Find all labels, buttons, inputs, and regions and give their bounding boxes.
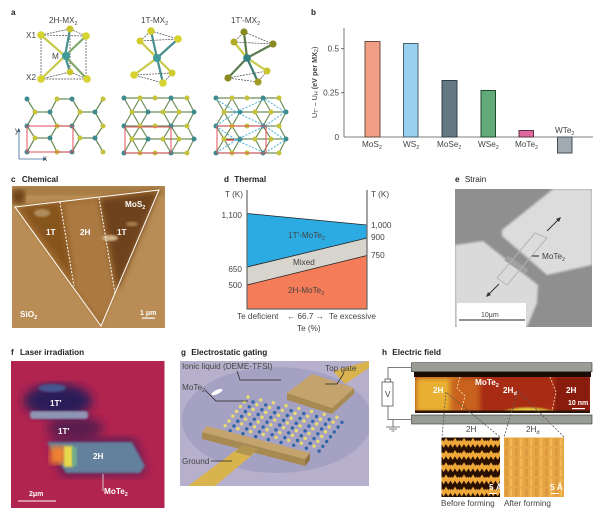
bar labels: WTe bbox=[555, 126, 571, 135]
heading: c Chemical bbox=[11, 175, 58, 184]
bar labels: MoS bbox=[362, 140, 379, 149]
label 2H: 2H bbox=[80, 228, 91, 237]
axes indicator bbox=[15, 126, 47, 163]
left axis labels bbox=[222, 190, 243, 290]
lattice dots bbox=[224, 395, 344, 453]
panel a: crystal structures bbox=[11, 8, 288, 163]
bar labels: WSe bbox=[478, 140, 496, 149]
panel d: thermal phase diagram bbox=[222, 175, 392, 333]
label 2H lower: 2H bbox=[466, 425, 477, 434]
bars bbox=[365, 42, 572, 153]
voltage label: V bbox=[385, 390, 391, 399]
heading: h Electric field bbox=[382, 348, 441, 357]
panel f: laser irradiation bbox=[11, 348, 164, 508]
STM before forming: 5 Å bbox=[489, 482, 502, 492]
2Hd label: d bbox=[513, 391, 517, 397]
label 1T' lower: 1T′ bbox=[58, 427, 70, 436]
label SiO2: 2 bbox=[34, 315, 37, 321]
panel e: strain bbox=[455, 175, 592, 327]
heading: f Laser irradiation bbox=[11, 348, 84, 357]
2H unit cell bbox=[37, 26, 91, 83]
bar labels: 2 bbox=[379, 145, 382, 151]
heading: d Thermal bbox=[224, 175, 266, 184]
axes bbox=[341, 28, 593, 137]
labels in image: 2H bbox=[433, 386, 444, 395]
STM after forming: 5 Å bbox=[550, 482, 563, 492]
heading: e Strain bbox=[455, 175, 487, 184]
region borders bbox=[247, 214, 367, 285]
MoTe2 label bbox=[532, 252, 565, 263]
optical image bbox=[11, 361, 164, 508]
right axis labels: 1,000 bbox=[371, 221, 392, 230]
label M: M bbox=[52, 52, 59, 61]
left axis labels: T (K) bbox=[225, 190, 243, 199]
panel c: chemical bbox=[11, 175, 165, 328]
2Hd label: 2H bbox=[503, 386, 513, 395]
panel g: electrostatic gating bbox=[180, 348, 372, 486]
MoTe2 label: 2 bbox=[562, 257, 565, 263]
1T lattice top view bbox=[122, 96, 196, 156]
heading: 2H-MX2: 2H-MX bbox=[49, 16, 74, 25]
label 2Hd lower: 2H bbox=[526, 425, 536, 434]
MoTe2 label bbox=[103, 474, 128, 498]
right axis labels: T (K) bbox=[371, 190, 389, 199]
region labels: 2 bbox=[322, 236, 325, 242]
left axis labels: 1,100 bbox=[222, 211, 242, 220]
heading: 1T'-MX2: 1T′-MX bbox=[231, 16, 257, 25]
tick labels: 0.5 bbox=[328, 44, 339, 54]
heading: 1T-MX2: 2 bbox=[165, 21, 168, 27]
ionic liquid label: Ionic liquid (DEME-TFSI) bbox=[182, 362, 273, 371]
top plate bbox=[412, 363, 592, 372]
2H right label: 2H bbox=[566, 386, 577, 395]
ground label bbox=[182, 457, 232, 466]
dark band bbox=[414, 372, 591, 377]
bar labels: MoTe bbox=[515, 140, 535, 149]
panel h: electric field bbox=[382, 348, 592, 508]
y axis title: 2 bbox=[314, 49, 320, 52]
label SiO2: SiO bbox=[20, 310, 34, 319]
MoTe2 label bbox=[182, 383, 248, 401]
caption before forming: Before forming bbox=[441, 499, 495, 508]
MoTe2 label: MoTe bbox=[542, 252, 562, 261]
label 2Hd lower: d bbox=[536, 430, 540, 436]
arrow up-right bbox=[547, 217, 561, 231]
circuit bbox=[382, 368, 411, 431]
y axis title: – U bbox=[310, 95, 319, 108]
left axis labels: 500 bbox=[228, 281, 242, 290]
y axis title: U bbox=[310, 113, 319, 118]
bar labels: 2 bbox=[458, 145, 461, 151]
right axis labels: 900 bbox=[371, 233, 385, 242]
x axis labels: Te excessive bbox=[329, 312, 376, 321]
x axis labels bbox=[237, 312, 376, 333]
label 1T right: 1T bbox=[117, 228, 127, 237]
bar labels: MoSe bbox=[437, 140, 458, 149]
highlight bbox=[211, 388, 223, 396]
right axis labels bbox=[371, 190, 392, 260]
scale bar box bbox=[457, 303, 526, 327]
y axis title: H bbox=[314, 91, 320, 95]
left axis labels: 650 bbox=[228, 265, 242, 274]
MoTe2 label: 2 bbox=[496, 383, 499, 389]
scale bar bbox=[18, 491, 56, 502]
heading: 2H-MX2: 2 bbox=[74, 21, 78, 27]
ionic liquid label bbox=[182, 362, 281, 380]
zoom guide lines bbox=[442, 391, 564, 437]
right axis labels: 750 bbox=[371, 251, 385, 260]
orange region bbox=[247, 256, 367, 309]
ground strip bbox=[188, 448, 255, 486]
bottom plate bbox=[412, 415, 592, 424]
bar labels: 2 bbox=[416, 145, 419, 151]
labels: 1T′ bbox=[50, 399, 62, 408]
1T' lattice top view bbox=[214, 96, 288, 156]
x axis labels: ← 66.7 → bbox=[287, 312, 324, 321]
2H label: 2H-MoTe bbox=[288, 286, 321, 295]
panel b label: b bbox=[311, 8, 316, 17]
tick labels: 0.25 bbox=[323, 88, 339, 98]
tick labels bbox=[323, 44, 339, 142]
panel b: bar chart bbox=[310, 8, 593, 153]
1T' unit cell bbox=[224, 28, 277, 86]
axes indicator: y bbox=[15, 126, 20, 135]
region labels: 1T′-MoTe bbox=[288, 231, 322, 240]
tick labels: 0 bbox=[334, 133, 339, 142]
microscope image bbox=[455, 189, 592, 327]
MoTe2 label: MoTe bbox=[182, 383, 202, 392]
blue region bbox=[247, 214, 367, 267]
bar labels bbox=[362, 126, 574, 151]
1T unit cell bbox=[130, 27, 182, 87]
2H lattice top view bbox=[24, 96, 106, 154]
MoTe2 label: MoTe bbox=[104, 487, 125, 496]
panel a label: a bbox=[11, 8, 16, 17]
y axis title: ) bbox=[310, 47, 319, 49]
ground label: Ground bbox=[182, 457, 210, 466]
top gate label: Top gate bbox=[325, 364, 357, 373]
arrow down-left bbox=[486, 284, 499, 297]
bar labels: 2 bbox=[571, 131, 574, 137]
2H label: 2 bbox=[321, 291, 324, 297]
mixed region bbox=[247, 238, 367, 285]
scale bar: 10 nm bbox=[568, 400, 588, 407]
heading: g Electrostatic gating bbox=[181, 348, 267, 357]
axes indicator: x bbox=[43, 154, 47, 163]
bar labels: WS bbox=[403, 140, 416, 149]
STM before forming bbox=[442, 438, 502, 497]
heading: 1T'-MX2: 2 bbox=[257, 21, 260, 27]
caption after forming: After forming bbox=[504, 499, 551, 508]
x axis labels: Te (%) bbox=[297, 324, 321, 333]
ground stem bbox=[235, 445, 258, 456]
top gate label bbox=[325, 364, 357, 384]
label 2H: 2H bbox=[93, 452, 104, 461]
labels: 2 bbox=[142, 205, 145, 211]
top gate lead bbox=[333, 361, 369, 384]
y axis title: (eV per MX bbox=[310, 52, 319, 91]
MoTe2 label: 2 bbox=[202, 388, 205, 394]
STM after forming bbox=[504, 438, 564, 497]
device image bbox=[415, 377, 590, 413]
label X1: X1 bbox=[26, 31, 36, 40]
bar labels: 2 bbox=[535, 145, 538, 151]
mixed label: Mixed bbox=[293, 258, 315, 267]
label 1T left: 1T bbox=[46, 228, 56, 237]
MoTe2 label: 2 bbox=[125, 492, 128, 498]
heading: 1T-MX2: 1T-MX bbox=[141, 16, 165, 25]
ground bar bbox=[202, 432, 305, 466]
AFM image bbox=[12, 186, 165, 328]
MoTe2 label: MoTe bbox=[475, 378, 496, 387]
axes bbox=[247, 190, 367, 309]
scale bar box: 10μm bbox=[481, 312, 499, 319]
device illustration bbox=[180, 361, 372, 486]
top gate pad bbox=[287, 388, 354, 414]
label X2: X2 bbox=[26, 73, 36, 82]
labels: MoS bbox=[125, 200, 142, 209]
y axis title: T′ bbox=[314, 108, 320, 113]
bar labels: 2 bbox=[496, 145, 499, 151]
x axis labels: Te deficient bbox=[237, 312, 279, 321]
scale bar: 2μm bbox=[29, 491, 43, 498]
scale bar: 1 μm bbox=[140, 310, 156, 317]
